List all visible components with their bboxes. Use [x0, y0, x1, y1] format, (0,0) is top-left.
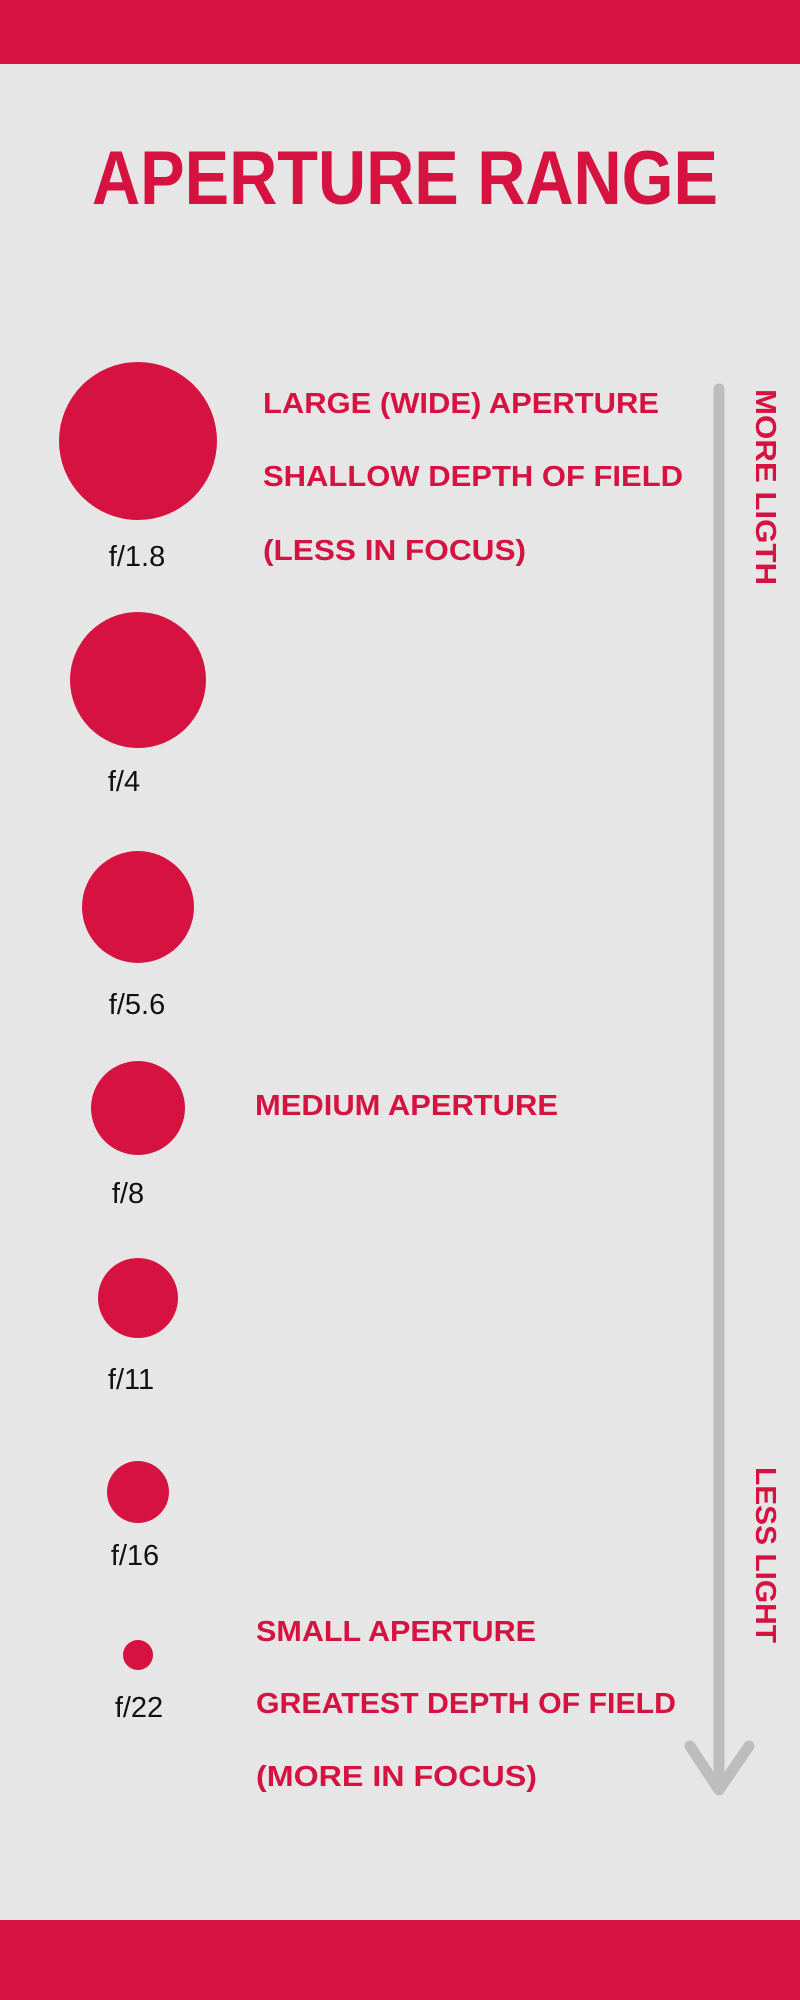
text block: large aperture — [263, 388, 683, 567]
aperture f/1.8: f/1.8 — [109, 541, 165, 573]
aperture f/22: f/22 — [115, 1692, 163, 1724]
aperture f/4: f/4 — [108, 766, 140, 798]
title: APERTURE RANGE — [92, 136, 718, 221]
label: less light: LESS LIGHT — [749, 1467, 781, 1643]
aperture f/16 — [107, 1461, 169, 1572]
top bar — [0, 0, 800, 64]
text block: large aperture: (LESS IN FOCUS) — [263, 535, 526, 567]
aperture f/5.6: f/5.6 — [109, 989, 165, 1021]
aperture f/1.8 — [59, 362, 217, 573]
bottom bar — [0, 1920, 800, 2000]
text block: small aperture: SMALL APERTURE — [256, 1616, 536, 1648]
aperture f/11 — [98, 1258, 178, 1396]
aperture f/4 — [70, 612, 206, 798]
text block: small aperture — [256, 1616, 676, 1793]
text block: large aperture: SHALLOW DEPTH OF FIELD — [263, 461, 683, 493]
aperture f/5.6 — [82, 851, 194, 1021]
text block: small aperture: (MORE IN FOCUS) — [256, 1761, 537, 1793]
aperture f/8 — [91, 1061, 185, 1210]
aperture f/16: f/16 — [111, 1540, 159, 1572]
text block: medium aperture: MEDIUM APERTURE — [255, 1090, 558, 1122]
aperture f/8: f/8 — [112, 1178, 144, 1210]
text block: large aperture: LARGE (WIDE) APERTURE — [263, 388, 659, 420]
text block: small aperture: GREATEST DEPTH OF FIELD — [256, 1688, 676, 1720]
aperture f/22 — [115, 1640, 163, 1724]
arrow: light scale — [690, 389, 749, 1790]
label: more light: MORE LIGTH — [749, 389, 781, 585]
aperture f/11: f/11 — [108, 1364, 154, 1396]
